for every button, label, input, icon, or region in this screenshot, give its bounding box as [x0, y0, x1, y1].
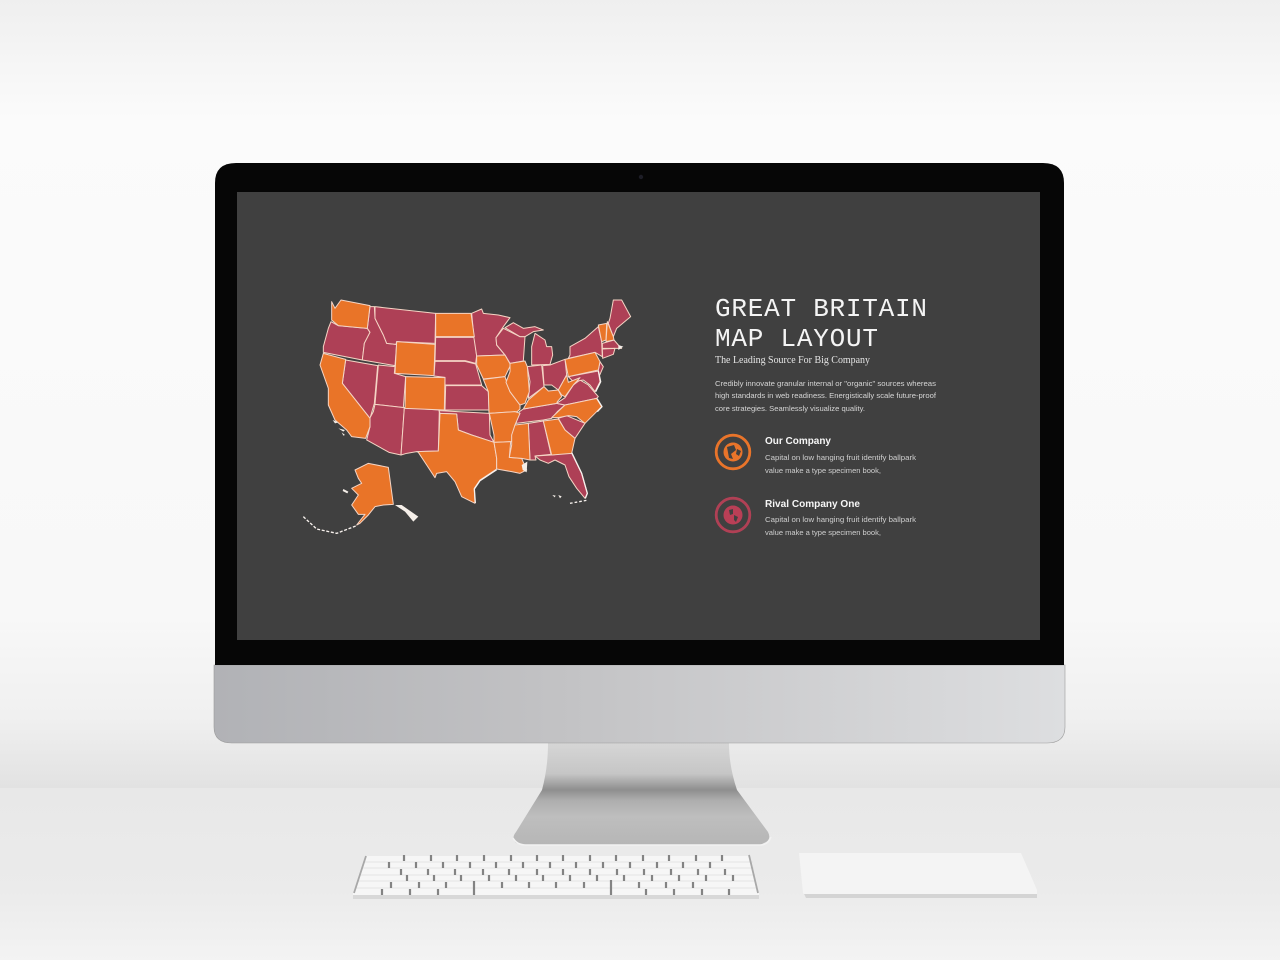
body paragraph — [715, 379, 937, 413]
monitor chin — [214, 665, 1065, 743]
monitor bezel — [215, 163, 1064, 665]
title: MAP LAYOUT — [715, 324, 878, 354]
title — [715, 294, 927, 354]
coastline details and islands — [333, 345, 623, 522]
icon: rival company globe — [716, 498, 750, 532]
body paragraph: core strategies. Seamlessly visualize quality. — [715, 404, 865, 413]
legend: rival company one: Rival Company One — [765, 498, 860, 510]
screen panel — [237, 192, 1040, 640]
legend: our company: value make a type specimen book, — [765, 466, 881, 475]
state group: crimson — [323, 300, 631, 498]
monitor stand — [513, 743, 771, 845]
legend: rival company one: Capital on low hanging fruit identify ballpark — [765, 515, 916, 524]
trackpad — [799, 853, 1037, 898]
legend: rival company one — [765, 498, 916, 537]
webcam — [639, 175, 643, 179]
keyboard — [353, 855, 759, 899]
map: United States — [303, 300, 631, 533]
legend: our company: Capital on low hanging fruit identify ballpark — [765, 453, 916, 462]
legend: rival company one: value make a type specimen book, — [765, 528, 881, 537]
white coastline strokes — [303, 371, 602, 533]
subtitle: The Leading Source For Big Company — [715, 355, 871, 366]
body paragraph: high standards in web readiness. Energistically scale future-proof — [715, 391, 937, 400]
legend: our company: Our Company — [765, 435, 831, 447]
icon: our company globe — [716, 435, 750, 469]
state group: orange — [320, 300, 614, 525]
title: GREAT BRITAIN — [715, 294, 927, 324]
legend: our company — [765, 435, 916, 475]
body paragraph: Credibly innovate granular internal or "organic" sources whereas — [715, 379, 936, 388]
